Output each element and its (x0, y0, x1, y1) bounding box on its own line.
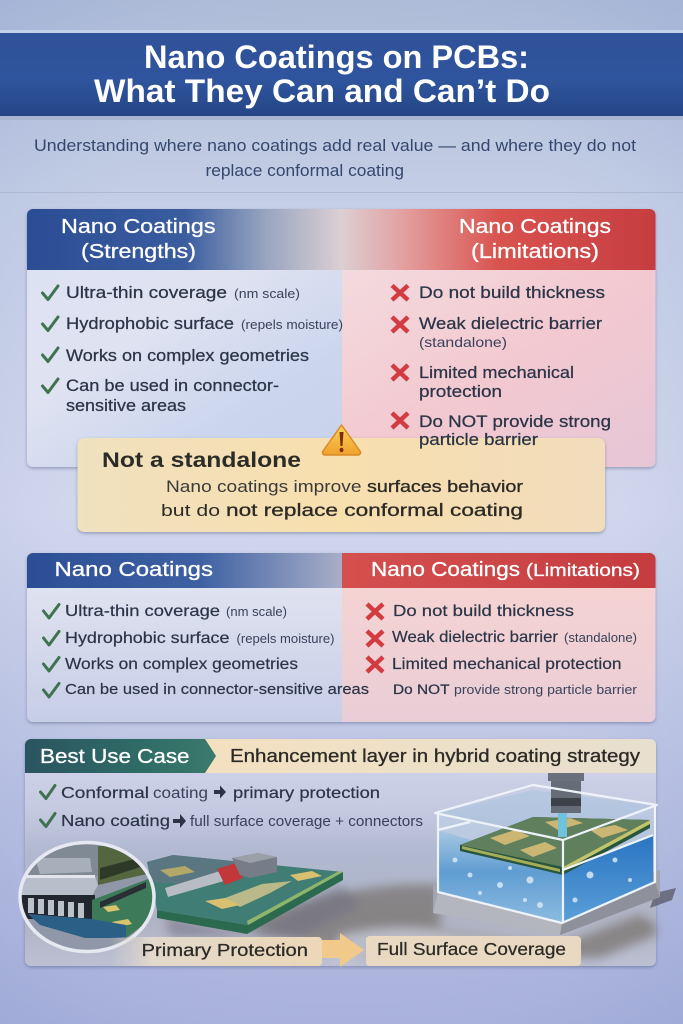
panel: compact comparison (27, 553, 656, 722)
limitations list: Do NOT provide strong (419, 413, 611, 431)
water right (563, 835, 653, 923)
left header (27, 553, 342, 588)
strengths list: Hydrophobic surface (66, 315, 234, 333)
subtitle: replace conformal coating (206, 162, 404, 180)
label: primary protection: Primary Protection (142, 940, 308, 960)
callout message: Nano coatings improve (166, 478, 362, 496)
limitations list: provide strong particle barrier (454, 682, 638, 697)
heading: strengths: Nano Coatings (61, 216, 216, 238)
water left (438, 830, 563, 923)
strengths list: (nm scale) (234, 286, 300, 301)
nozzle (548, 773, 584, 837)
header: best use case tag (25, 739, 216, 773)
list: nano coating (40, 813, 423, 830)
arrow: primary to full coverage (322, 933, 364, 967)
strengths list: Can be used in connector-sensitive areas (65, 681, 369, 698)
limitations list (367, 603, 638, 697)
strengths list: Hydrophobic surface (65, 630, 230, 647)
strengths list: (repels moisture) (236, 632, 334, 646)
illustration: coated PCB with applicator (147, 853, 343, 934)
list: conformal coating: Conformal (61, 785, 149, 802)
title banner (0, 30, 683, 120)
subtitle (34, 137, 636, 180)
glass edges (435, 785, 657, 923)
limitations list: (standalone) (419, 334, 507, 350)
heading: limitations (371, 559, 640, 581)
strengths list: (repels moisture) (241, 317, 343, 332)
illustration: magnifier detail (18, 841, 156, 954)
heading: strengths (61, 216, 216, 263)
label: primary protection (110, 937, 322, 966)
limitations list: Limited mechanical protection (392, 656, 622, 673)
illustration: immersion tank (433, 773, 660, 935)
heading: limitations: Nano Coatings (371, 559, 520, 581)
strengths list (44, 603, 369, 698)
strengths list: sensitive areas (66, 397, 186, 415)
applicator (165, 853, 277, 897)
limitations list: Weak dielectric barrier (419, 315, 603, 333)
limitations list: Weak dielectric barrier (392, 629, 559, 646)
strengths list: Works on complex geometries (66, 347, 309, 365)
strengths list: Ultra-thin coverage (66, 284, 227, 302)
green board front (92, 879, 152, 938)
strengths list: Works on complex geometries (65, 656, 298, 673)
pin row (20, 895, 95, 919)
limitations list: Do not build thickness (419, 284, 605, 302)
heading: limitations: Nano Coatings (459, 216, 611, 238)
strengths list (42, 284, 343, 415)
strengths list: (nm scale) (226, 605, 287, 619)
limitations list: Do not build thickness (393, 603, 574, 620)
tank base (433, 870, 660, 935)
limitations list: Do NOT (393, 682, 450, 697)
heading: strengths: (Strengths) (81, 241, 196, 263)
panel: strengths and limitations overview (27, 209, 656, 467)
callout message: not replace conformal coating (226, 500, 523, 520)
list: nano coating: Nano coating (61, 813, 170, 830)
subtitle: Understanding where nano coatings add real value — and where they do not (34, 137, 636, 155)
limitations list: (standalone) (564, 631, 637, 645)
heading: limitations (459, 216, 611, 263)
label: full surface coverage (366, 936, 581, 966)
heading: limitations: (Limitations) (526, 560, 640, 580)
heading: limitations: (Limitations) (471, 241, 599, 263)
callout message: surfaces behavior (367, 477, 523, 496)
list: conformal coating: primary protection (233, 785, 380, 802)
limitation text overlapping callout: particle barrier (419, 431, 539, 449)
list: conformal coating: coating (153, 785, 208, 802)
right header (342, 553, 656, 588)
list: nano coating: full surface coverage + connectors (190, 814, 423, 830)
limitations list: protection (419, 383, 502, 401)
tank upper water tone (438, 790, 653, 838)
limitations list (392, 284, 611, 431)
green board behind (98, 846, 146, 885)
chip silver body (22, 876, 98, 896)
chip top (28, 844, 98, 876)
label: full surface coverage: Full Surface Coverage (377, 939, 566, 959)
limitations list: Limited mechanical (419, 364, 574, 382)
blue board edge (28, 914, 126, 938)
panel header gradient (27, 209, 656, 270)
submerged PCB (460, 817, 650, 875)
callout message: but do (161, 501, 220, 520)
strengths list: Can be used in connector- (66, 377, 279, 395)
strengths list: Ultra-thin coverage (65, 603, 220, 620)
callout message (161, 477, 523, 520)
callout heading: Not a standalone (102, 449, 301, 472)
icon: warning triangle (323, 425, 360, 455)
ground texture (165, 884, 676, 960)
title line 1: Nano Coatings on PCBs: (144, 39, 529, 75)
header: best use case tag: Best Use Case (40, 746, 190, 768)
panel: best use case (18, 739, 676, 967)
header: enhancement layer (205, 739, 656, 773)
heading: coatings: Nano Coatings (54, 559, 213, 581)
title line 2: What They Can and Can’t Do (94, 73, 550, 109)
list: conformal coating (40, 785, 380, 802)
callout: not a standalone (78, 431, 605, 532)
header: enhancement layer: Enhancement layer in hybrid coating strategy (230, 746, 640, 766)
